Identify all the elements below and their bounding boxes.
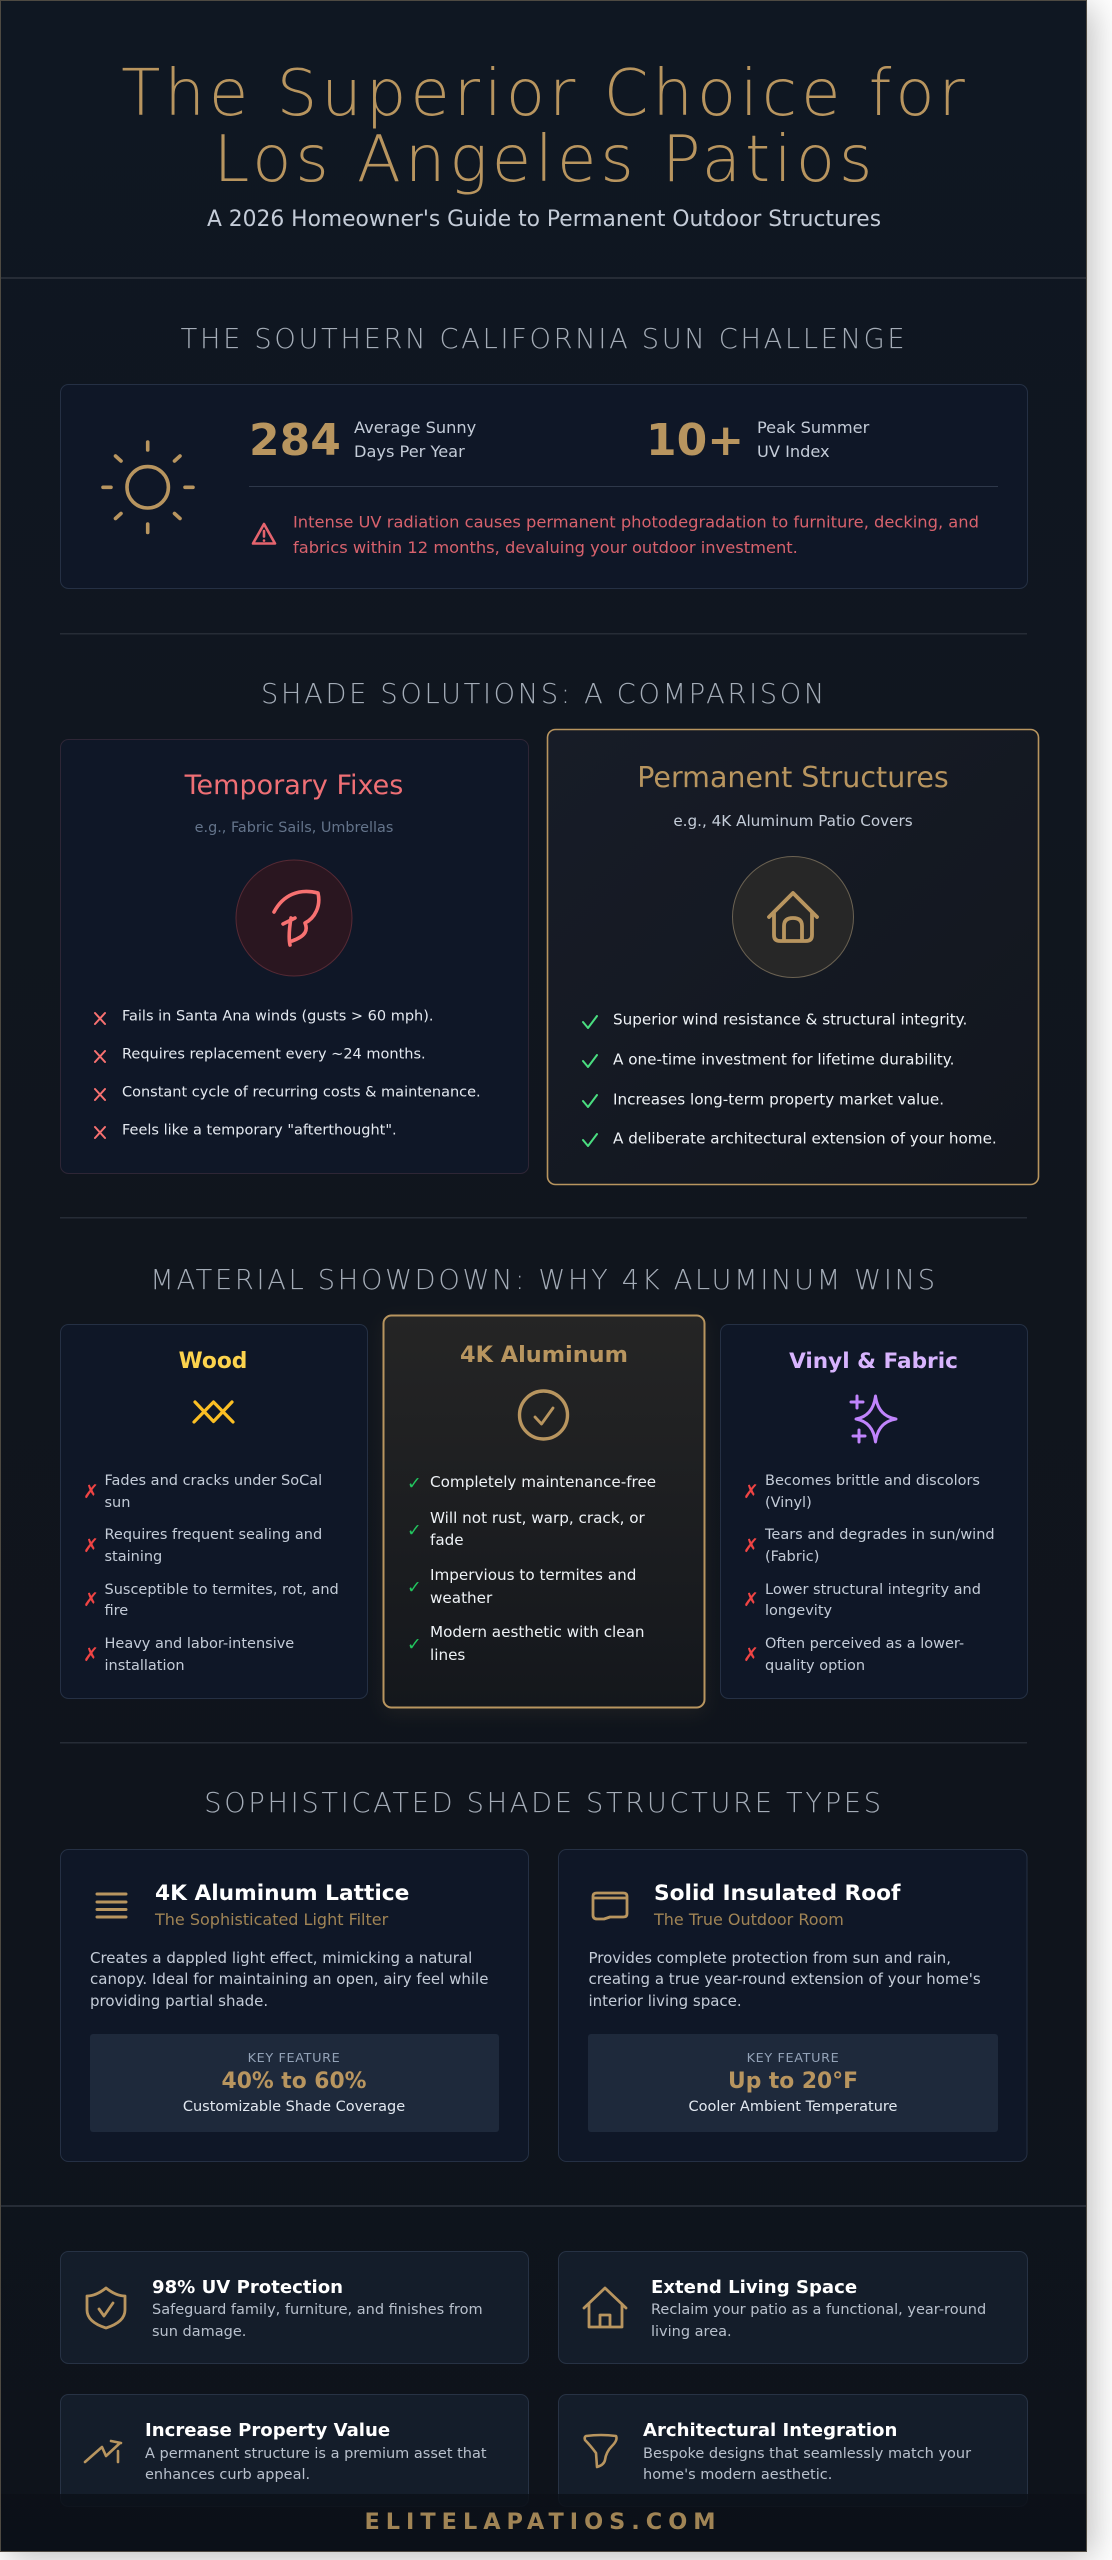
key feature: shade coverage: Customizable Shade Coverage [183, 2099, 405, 2115]
list: vinyl drawbacks [743, 1473, 995, 1674]
list: wood drawbacks: sun [104, 1495, 130, 1511]
stat: uv index: Peak Summer [757, 418, 870, 437]
card: uv protection: Safeguard family, furniture, and finishes from [152, 2302, 483, 2318]
card: living space [558, 2252, 1028, 2364]
icon: sparkles [851, 1396, 896, 1442]
list: aluminum benefits: Completely maintenance-free [430, 1473, 656, 1491]
list: aluminum benefits [407, 1473, 656, 1664]
panel: 4K aluminum [383, 1316, 705, 1713]
list: temporary drawbacks [95, 1008, 481, 1138]
icon: trend [85, 2441, 121, 2462]
panel: temporary fixes: e.g., Fabric Sails, Umbrellas [195, 820, 393, 836]
panel: wood [60, 1324, 368, 1698]
list: wood drawbacks: ✗ [83, 1644, 99, 1666]
title [121, 57, 969, 197]
list: permanent benefits [583, 1010, 997, 1148]
key feature: shade coverage: KEY FEATURE [248, 2051, 340, 2066]
list: vinyl drawbacks: (Fabric) [765, 1549, 819, 1565]
list: wood drawbacks [83, 1473, 339, 1674]
heading: sun challenge: THE SOUTHERN CALIFORNIA SUN CHALLENGE [181, 324, 907, 355]
panel: aluminum lattice: Creates a dappled light effect, mimicking a natural [90, 1949, 472, 1967]
panel: aluminum lattice [60, 1850, 528, 2162]
list: temporary drawbacks: Requires replacement every ~24 months. [122, 1046, 426, 1062]
card: living space: living area. [651, 2324, 732, 2340]
warning text: fabrics within 12 months, devaluing your outdoor investment. [293, 538, 798, 557]
list: vinyl drawbacks: ✗ [743, 1589, 759, 1611]
card: architectural integration [558, 2394, 1028, 2506]
list: aluminum benefits: Will not rust, warp, crack, or [430, 1509, 646, 1527]
card: uv protection [60, 2252, 528, 2364]
list: aluminum benefits: lines [430, 1646, 465, 1664]
list: vinyl drawbacks: Becomes brittle and discolors [765, 1473, 980, 1489]
list: permanent benefits: A one-time investment for lifetime durability. [613, 1050, 954, 1068]
list: vinyl drawbacks: Often perceived as a lower- [765, 1636, 964, 1652]
key feature: shade coverage: 40% to 60% [222, 2069, 367, 2094]
key feature: temperature: Cooler Ambient Temperature [689, 2099, 898, 2115]
icon: sun [103, 442, 193, 532]
panel: vinyl and fabric [720, 1324, 1028, 1698]
list: permanent benefits: Increases long-term property market value. [613, 1090, 944, 1108]
stat: uv index [646, 415, 870, 466]
card: uv protection: sun damage. [152, 2324, 246, 2340]
panel: permanent structures: e.g., 4K Aluminum Patio Covers [673, 812, 913, 830]
list: vinyl drawbacks: Lower structural integrity and [765, 1582, 981, 1598]
icon: shield [87, 2288, 125, 2328]
panel: aluminum lattice: canopy. Ideal for maintaining an open, airy feel while [90, 1970, 488, 1988]
list: permanent benefits: Superior wind resistance & structural integrity. [613, 1010, 967, 1028]
card: property value: A permanent structure is a premium asset that [145, 2446, 487, 2462]
list: vinyl drawbacks: ✗ [743, 1481, 759, 1503]
footer [1, 2494, 1086, 2551]
panel: permanent structures [548, 730, 1038, 1184]
list: aluminum benefits: fade [430, 1531, 464, 1549]
list: wood drawbacks: Fades and cracks under SoCal [104, 1473, 322, 1489]
list: aluminum benefits: ✓ [407, 1635, 422, 1655]
list: wood drawbacks: staining [104, 1549, 162, 1565]
key feature: shade coverage [90, 2034, 499, 2132]
list: wood drawbacks: fire [104, 1603, 128, 1619]
panel: sun challenge [60, 384, 1028, 588]
list: aluminum benefits: ✓ [407, 1521, 422, 1541]
card: property value [60, 2394, 528, 2506]
panel: temporary fixes: Temporary Fixes [184, 770, 403, 801]
icon: wood grain [194, 1402, 233, 1422]
title: Los Angeles Patios [214, 123, 876, 197]
panel: solid insulated roof: creating a true year-round extension of your home's [588, 1970, 981, 1988]
icon: solid roof [593, 1893, 627, 1919]
panel: permanent structures: Permanent Structures [637, 761, 949, 794]
list: vinyl drawbacks: quality option [765, 1658, 865, 1674]
list: wood drawbacks: installation [104, 1658, 185, 1674]
stat: uv index: UV Index [757, 442, 830, 461]
icon: torn sail [236, 860, 352, 976]
card: property value: Increase Property Value [145, 2420, 390, 2441]
panel: vinyl and fabric: Vinyl & Fabric [789, 1349, 958, 1374]
list: wood drawbacks: Heavy and labor-intensive [104, 1636, 294, 1652]
list: vinyl drawbacks: longevity [765, 1603, 833, 1619]
title: The Superior Choice for [121, 57, 969, 131]
list: vinyl drawbacks: ✗ [743, 1644, 759, 1666]
key feature: temperature [588, 2034, 998, 2132]
card: uv protection: 98% UV Protection [152, 2277, 343, 2298]
stat: sunny days: 284 [249, 415, 341, 466]
header [121, 57, 969, 232]
icon: house [732, 856, 854, 978]
card: architectural integration: Architectural Integration [643, 2420, 897, 2441]
heading: comparison: SHADE SOLUTIONS: A COMPARISON [261, 679, 827, 710]
key feature: temperature: Up to 20°F [728, 2069, 858, 2094]
card: property value: enhances curb appeal. [145, 2467, 310, 2483]
panel: temporary fixes [60, 740, 528, 1174]
key feature: temperature: KEY FEATURE [747, 2051, 839, 2066]
icon: funnel [585, 2435, 616, 2467]
list: wood drawbacks: ✗ [83, 1481, 99, 1503]
panel: solid insulated roof: Provides complete protection from sun and rain, [588, 1949, 951, 1967]
panel: solid insulated roof [558, 1850, 1027, 2162]
footer: ELITELAPATIOS.COM [364, 2509, 722, 2535]
stat: sunny days: Average Sunny [354, 418, 477, 437]
panel: aluminum lattice: The Sophisticated Light Filter [154, 1910, 389, 1929]
list: aluminum benefits: weather [430, 1589, 493, 1607]
list: permanent benefits: A deliberate architectural extension of your home. [613, 1130, 997, 1148]
heading: structure types: SOPHISTICATED SHADE STRUCTURE TYPES [204, 1788, 884, 1819]
panel: solid insulated roof: Solid Insulated Roof [654, 1881, 901, 1906]
warning text [293, 512, 979, 557]
icon: warning [253, 524, 275, 544]
panel: 4K aluminum: 4K Aluminum [460, 1342, 628, 1368]
card: architectural integration: home's modern aesthetic. [643, 2467, 832, 2483]
card: living space: Reclaim your patio as a functional, year-round [651, 2302, 986, 2318]
list: vinyl drawbacks: (Vinyl) [765, 1495, 812, 1511]
icon: lattice [97, 1894, 126, 1917]
list: aluminum benefits: ✓ [407, 1578, 422, 1598]
list: wood drawbacks: ✗ [83, 1535, 99, 1557]
card: architectural integration: Bespoke designs that seamlessly match your [643, 2446, 971, 2462]
list: aluminum benefits: Modern aesthetic with clean [430, 1623, 645, 1641]
list: wood drawbacks: ✗ [83, 1589, 99, 1611]
list: vinyl drawbacks: Tears and degrades in sun/wind [764, 1527, 995, 1543]
icon: check circle [520, 1391, 568, 1439]
panel: aluminum lattice: 4K Aluminum Lattice [155, 1881, 409, 1906]
subtitle: A 2026 Homeowner's Guide to Permanent Outdoor Structures [207, 207, 881, 232]
list: temporary drawbacks: Constant cycle of recurring costs & maintenance. [122, 1084, 481, 1100]
stat: uv index: 10+ [646, 415, 744, 466]
panel: aluminum lattice: providing partial shade. [90, 1992, 268, 2010]
list: wood drawbacks: Requires frequent sealing and [104, 1527, 322, 1543]
list: temporary drawbacks: Feels like a temporary "afterthought". [122, 1122, 397, 1138]
list: aluminum benefits: ✓ [407, 1474, 422, 1494]
panel: wood: Wood [179, 1349, 247, 1374]
stat: sunny days: Days Per Year [354, 442, 465, 461]
list: aluminum benefits: Impervious to termites and [430, 1566, 636, 1584]
icon: house [584, 2288, 626, 2327]
panel: solid insulated roof: The True Outdoor Room [653, 1910, 844, 1929]
stat: sunny days [249, 415, 477, 466]
warning text: Intense UV radiation causes permanent photodegradation to furniture, decking, and [293, 512, 979, 532]
panel: solid insulated roof: interior living space. [588, 1992, 742, 2010]
card: living space: Extend Living Space [651, 2277, 857, 2298]
heading: material showdown: MATERIAL SHOWDOWN: WHY 4K ALUMINUM WINS [150, 1265, 938, 1296]
list: wood drawbacks: Susceptible to termites, rot, and [104, 1582, 339, 1598]
list: temporary drawbacks: Fails in Santa Ana winds (gusts > 60 mph). [122, 1008, 434, 1024]
list: vinyl drawbacks: ✗ [743, 1535, 759, 1557]
